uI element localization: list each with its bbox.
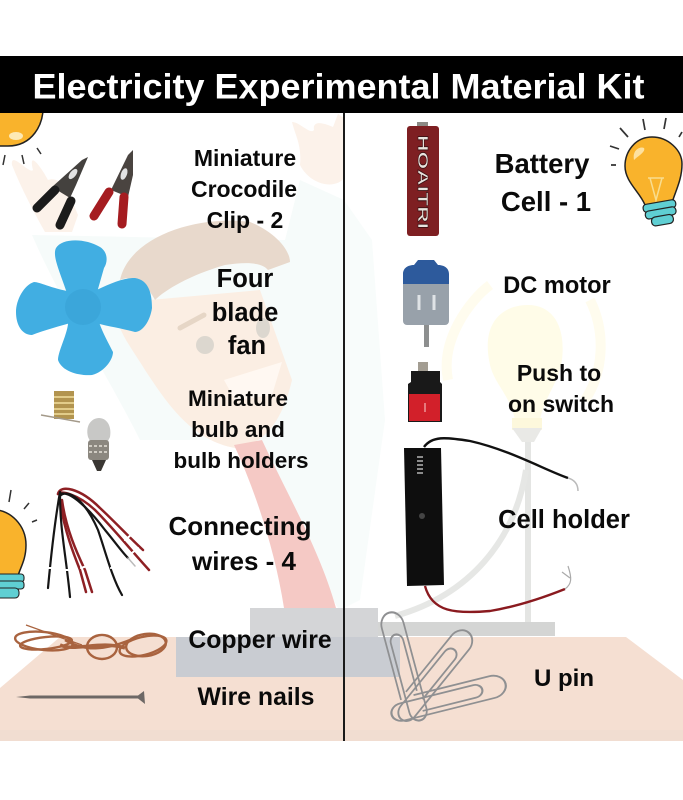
- icon: cell holder with wires: [404, 438, 578, 612]
- icon: dc motor: [403, 260, 449, 347]
- icon: top-left lightbulb: [0, 105, 43, 165]
- title banner: [0, 56, 683, 113]
- label: connecting wires: Connecting: [168, 511, 312, 541]
- miniature bulb: [87, 418, 110, 471]
- label: miniature bulb and holders: Miniature: [188, 386, 288, 411]
- icon: push switch: [408, 362, 442, 422]
- title banner: Electricity Experimental Material Kit: [32, 66, 645, 106]
- label: copper wire: Copper wire: [188, 627, 332, 654]
- label: push to on switch: Push to: [517, 360, 601, 386]
- label: battery cell: [495, 148, 591, 217]
- icon: left lightbulb: [0, 490, 37, 598]
- icon: bulb holder and miniature bulb: [41, 391, 110, 471]
- label: u pin: U pin: [534, 665, 594, 692]
- label: push to on switch: [508, 360, 614, 417]
- label: crocodile clip: Clip - 2: [207, 207, 283, 233]
- icon: copper wire: [14, 625, 168, 661]
- icon: wire nail: [16, 691, 145, 704]
- label: push to on switch: on switch: [508, 391, 614, 417]
- label: fan: Four: [217, 265, 273, 293]
- label: miniature bulb and holders: bulb holders: [174, 448, 308, 473]
- label: connecting wires: [168, 511, 312, 576]
- label: fan: blade: [212, 299, 278, 327]
- icon: crocodile clips: [37, 150, 133, 225]
- faded background illustration: [0, 113, 683, 741]
- label: crocodile clip: [191, 145, 297, 233]
- icon: four blade fan: [16, 240, 152, 375]
- label: battery cell: Cell - 1: [501, 186, 591, 217]
- label: dc motor: DC motor: [503, 273, 611, 299]
- bulb holder: [41, 391, 80, 422]
- icon: paper clips: [378, 610, 508, 725]
- red clip: [94, 150, 133, 224]
- icon: top-right lightbulb: [610, 118, 682, 228]
- label: wire nails: Wire nails: [198, 684, 314, 711]
- icon: battery cell: [407, 122, 439, 236]
- label: fan: [212, 265, 278, 360]
- label: crocodile clip: Crocodile: [191, 176, 297, 202]
- label: cell holder: Cell holder: [498, 506, 630, 534]
- black clip: [37, 157, 88, 225]
- label: miniature bulb and holders: [174, 386, 308, 473]
- label: crocodile clip: Miniature: [194, 145, 296, 171]
- label: miniature bulb and holders: bulb and: [191, 417, 285, 442]
- label: battery cell: Battery: [495, 148, 590, 179]
- icon: connecting wires: [46, 489, 149, 597]
- label: connecting wires: wires - 4: [191, 546, 297, 576]
- label: fan: fan: [228, 332, 266, 360]
- icon: battery cell: HOAITRI: [414, 135, 431, 229]
- center divider: [343, 113, 345, 741]
